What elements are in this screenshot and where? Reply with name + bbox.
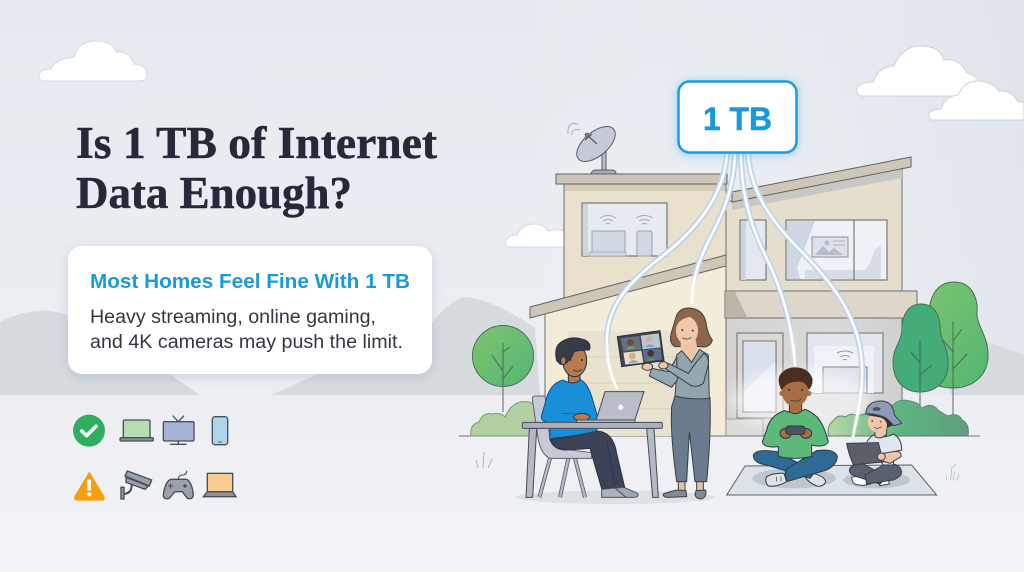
cloud: behind house bbox=[506, 224, 566, 247]
large window with picture bbox=[786, 220, 887, 280]
chair bbox=[532, 396, 592, 497]
grass right bbox=[946, 464, 959, 481]
narrow window bbox=[740, 220, 766, 280]
distant hills bbox=[0, 297, 1024, 395]
card heading: Most Homes Feel Fine With 1 TB bbox=[90, 270, 410, 293]
cloud: top right large bbox=[857, 46, 985, 96]
device icons bbox=[73, 415, 236, 500]
title: Is 1 TB of Internet bbox=[76, 118, 437, 168]
line to laptop bbox=[607, 153, 727, 388]
younger boy bbox=[847, 401, 902, 486]
lower window with device bbox=[807, 333, 883, 393]
slanted roof bbox=[732, 157, 911, 202]
icon: laptop orange bbox=[203, 473, 236, 497]
title bbox=[76, 118, 437, 218]
line to game controller bbox=[741, 153, 795, 365]
upper right wall bbox=[726, 168, 902, 292]
lower slanted roof bbox=[530, 255, 726, 318]
man and woman with table bbox=[515, 308, 715, 504]
card body text bbox=[90, 307, 403, 353]
callout card bbox=[68, 246, 432, 374]
card body text: and 4K cameras may push the limit. bbox=[90, 332, 403, 353]
ground bbox=[0, 395, 1024, 572]
table bbox=[522, 422, 662, 497]
house base glow bbox=[730, 370, 870, 430]
grass left bbox=[476, 452, 492, 468]
tree: left bbox=[459, 326, 540, 436]
ground line bbox=[726, 435, 980, 437]
icon: laptop green bbox=[120, 420, 153, 441]
laptop bbox=[577, 392, 644, 422]
trees: right bbox=[893, 282, 988, 436]
card body text: Heavy streaming, online gaming, bbox=[90, 307, 376, 328]
icon: green check bbox=[73, 415, 105, 447]
bush: left bbox=[471, 402, 546, 436]
front door bbox=[726, 333, 783, 436]
flat roof bbox=[556, 174, 727, 184]
video call tablet bbox=[617, 331, 664, 367]
icon: tv bbox=[163, 416, 194, 444]
mat bbox=[727, 465, 937, 495]
canopy bbox=[725, 291, 917, 436]
house bbox=[530, 120, 917, 436]
icon: game controller bbox=[163, 471, 193, 499]
icon: warning triangle bbox=[75, 473, 104, 500]
line to tablet bbox=[692, 153, 735, 303]
older boy bbox=[753, 367, 837, 486]
1 TB data box bbox=[678, 82, 796, 152]
upper left window bbox=[582, 203, 667, 256]
satellite dish bbox=[568, 120, 621, 174]
cloud: top left bbox=[39, 41, 147, 81]
picnic mat with children bbox=[727, 367, 959, 495]
man bbox=[541, 338, 638, 497]
woman bbox=[642, 308, 712, 499]
cloud: top right small bbox=[929, 81, 1024, 120]
bush: right bbox=[828, 400, 968, 436]
upper left wall bbox=[564, 184, 726, 314]
icon: security camera bbox=[121, 471, 152, 499]
icon: phone bbox=[212, 417, 228, 445]
data lines bbox=[607, 153, 862, 437]
lower left wall and garage bbox=[545, 264, 726, 436]
title: Data Enough? bbox=[76, 168, 352, 218]
line to kid tablet bbox=[748, 153, 862, 437]
1 TB data box: 1 TB bbox=[703, 101, 772, 137]
